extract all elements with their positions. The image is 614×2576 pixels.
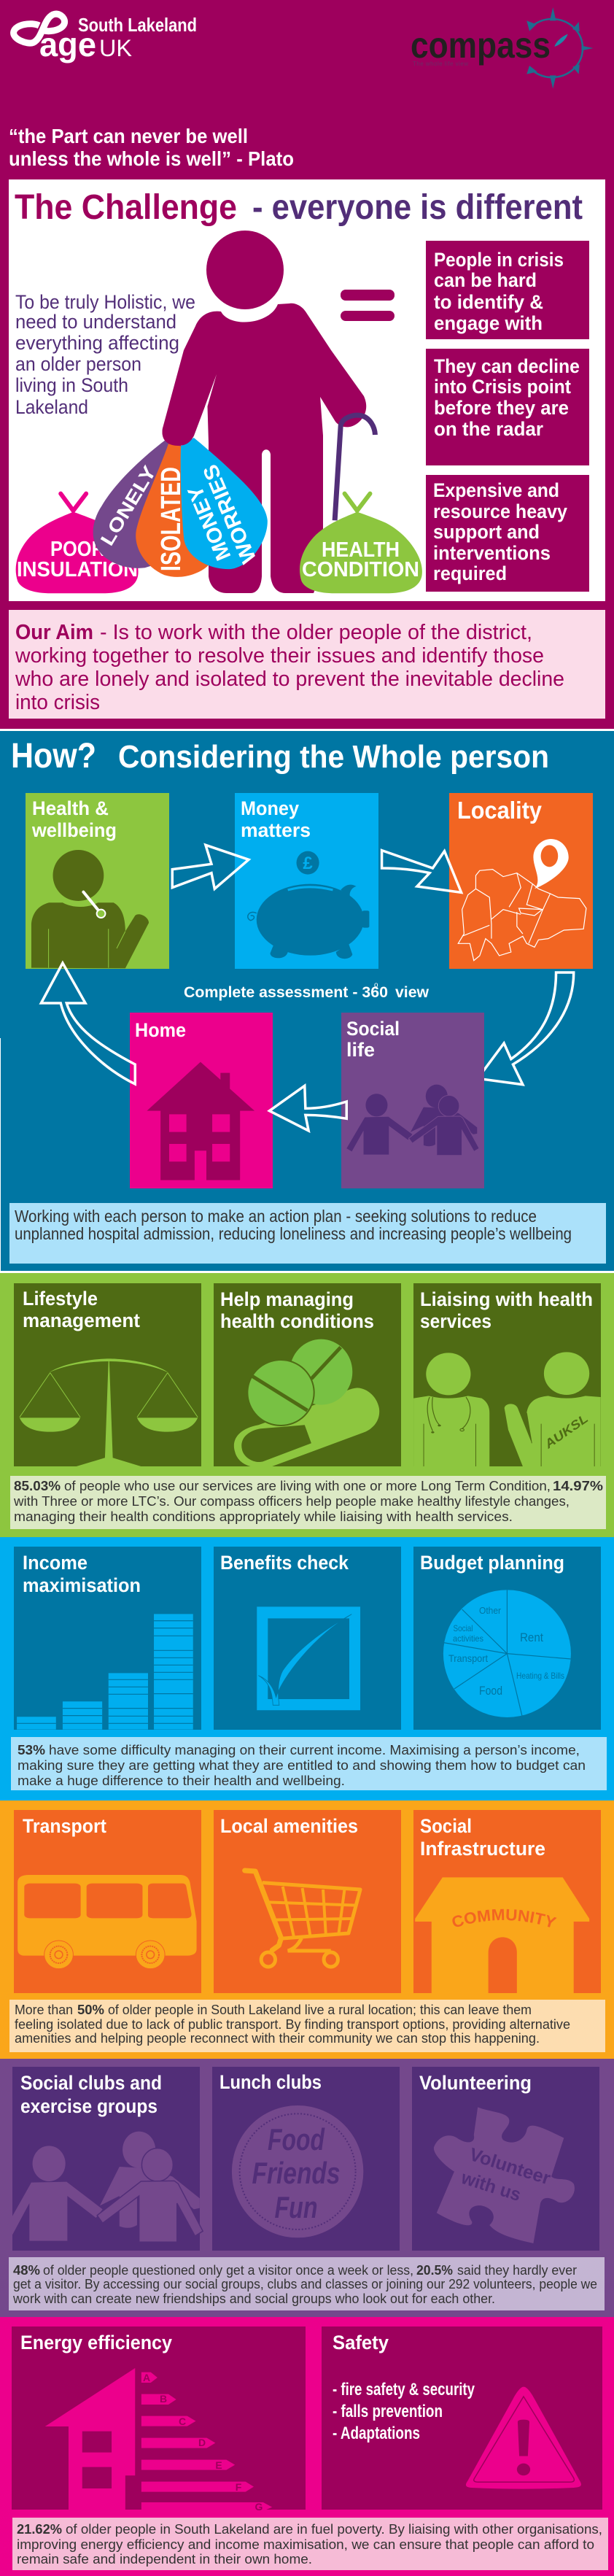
panel: liaising with health services: services [420, 1310, 491, 1332]
panel: volunteering: Volunteering [419, 2072, 532, 2094]
heading: how: Considering the Whole person [118, 739, 549, 775]
arrow: money to locality [382, 851, 462, 892]
text: rural statistics: amenities and helping people reconnect with their community we can stop this happening. [15, 2030, 540, 2046]
panel: our aim: working together to resolve their issues and identify those [15, 644, 544, 668]
text: holistic intro: To be truly Holistic, we [15, 291, 195, 313]
panel: income maximisation: Income [23, 1552, 88, 1574]
bag: money worries: WORRIES [199, 461, 261, 567]
heading: the challenge [15, 188, 583, 227]
card: locality: Locality [457, 797, 543, 824]
icon: equals sign [341, 290, 395, 321]
icon: warning triangle [466, 2387, 581, 2489]
panel: benefits check: Benefits check [220, 1552, 349, 1574]
section: social [0, 2059, 614, 2317]
icon: map of south lakeland with pin [458, 839, 586, 961]
section: how - whole person [0, 731, 614, 1271]
top section background [0, 0, 614, 729]
logo: South Lakeland Age UK [14, 14, 197, 63]
callout: expensive support: Expensive and [433, 479, 559, 501]
panel: liaising with health services [413, 1283, 601, 1466]
arrow: health to money [172, 845, 249, 889]
panel: help managing health conditions: Help managing [220, 1288, 354, 1310]
text: rural statistics: More than [15, 2002, 73, 2017]
heading: the challenge: The Challenge [15, 188, 237, 227]
card: money matters: Money [241, 797, 299, 819]
card: money matters: £ [303, 854, 313, 873]
callout: expensive support: interventions [433, 542, 551, 564]
panel: liaising with health services: Liaising with health [420, 1288, 593, 1310]
callout: people in crisis: People in crisis [434, 249, 564, 271]
card: home: Home [135, 1019, 186, 1041]
bag: money worries: MONEY [184, 482, 236, 564]
callout: people in crisis [426, 241, 589, 339]
callout: decline into crisis: on the radar [434, 418, 543, 440]
list: safety topics [333, 2380, 475, 2443]
panel: energy efficiency [12, 2326, 306, 2513]
chart: budget pie: activities [453, 1633, 483, 1644]
icon: piggy bank [248, 851, 369, 959]
text: health statistics [10, 1476, 606, 1529]
icon: house with energy ratings: B [160, 2393, 167, 2405]
card: social life: life [346, 1039, 375, 1061]
icon: house with energy ratings: F [236, 2481, 242, 2493]
bag: lonely: LONELY [96, 462, 160, 549]
text: income statistics: making sure they are getting what they are entitled to and showing them how to budget can [18, 1757, 586, 1773]
text: health statistics: managing their health conditions appropriately while liaising with health services. [14, 1509, 513, 1524]
card: health and wellbeing: wellbeing [31, 819, 117, 841]
icon: tick box [257, 1606, 360, 1710]
text: income statistics [11, 1737, 607, 1790]
text: holistic intro: living in South [15, 374, 128, 396]
logo: South Lakeland Age UK: UK [99, 35, 132, 61]
panel: social infrastructure: Social [420, 1815, 472, 1837]
heading: how [11, 737, 549, 775]
panel: social infrastructure: Infrastructure [420, 1838, 545, 1860]
text: holistic intro: an older person [15, 353, 141, 375]
callout: expensive support [426, 475, 589, 592]
icon: three people [346, 1085, 479, 1156]
text: income statistics: have some difficulty managing on their current income. Maximising a person’s income, [49, 1742, 580, 1757]
text: health statistics: with Three or more LTC’s. Our compass officers help people make healthy lifestyle changes, [13, 1493, 570, 1509]
card: health and wellbeing: Health & [32, 797, 109, 819]
text: rural statistics: 50% [77, 2002, 104, 2017]
list: safety topics: - falls prevention [333, 2402, 443, 2421]
callout: people in crisis: engage with [434, 312, 543, 334]
callout: decline into crisis: into Crisis point [434, 376, 571, 398]
bag: isolated: ISOLATED [156, 467, 187, 571]
callout: people in crisis: to identify & [434, 291, 543, 313]
card: health and wellbeing [26, 793, 169, 969]
arrow: locality to social life [478, 972, 574, 1085]
panel: social clubs and exercise groups: Social clubs and [20, 2072, 162, 2094]
text: holistic intro: everything affecting [15, 332, 179, 354]
text: health statistics: of people who use our services are living with one or more Long Term Condition, [64, 1478, 551, 1493]
icon: house with energy ratings: D [198, 2437, 206, 2448]
panel: income maximisation [14, 1547, 201, 1730]
text: action plan [9, 1203, 606, 1264]
icon: scales [20, 1358, 198, 1466]
text: fuel poverty statistics: improving energy efficiency and income maximisation, we can ensure that people can afford to [17, 2537, 594, 2552]
text: visitor statistics: 20.5% [416, 2262, 453, 2278]
callout: expensive support: support and [433, 521, 540, 543]
text: rural statistics: feeling isolated due to lack of public transport. By finding transport options, providing alternative [15, 2016, 570, 2032]
arrow: home to health [41, 963, 135, 1084]
icon: food friends fun stamp: Friends [252, 2156, 340, 2190]
icon: jigsaw piece: with us [458, 2167, 524, 2205]
icon: house with energy ratings: E [215, 2459, 222, 2471]
text: income statistics: 53% [18, 1742, 45, 1757]
panel: lifestyle management [14, 1283, 201, 1466]
logo: compass [411, 7, 594, 89]
text: fuel poverty statistics [12, 2518, 608, 2570]
panel: social clubs and exercise groups: exercise groups [20, 2095, 158, 2117]
icon: community building [415, 1877, 589, 1993]
text: complete assessment: view [395, 984, 430, 1001]
bag: poor insulation [16, 494, 139, 593]
panel: safety: Safety [333, 2332, 389, 2353]
bag: isolated [136, 444, 219, 577]
panel: lifestyle management: Lifestyle [23, 1288, 98, 1310]
text: complete assessment: o [374, 981, 378, 989]
bag: lonely [93, 438, 184, 568]
logo: compass: compass [411, 25, 551, 66]
text: holistic intro: Lakeland [15, 396, 88, 418]
callout: decline into crisis [426, 349, 589, 465]
text: health statistics: 14.97% [553, 1478, 603, 1493]
panel: our aim: who are lonely and isolated to prevent the inevitable decline [15, 668, 564, 691]
text: visitor statistics: of older people questioned only get a visitor once a week or less, [43, 2262, 413, 2278]
icon: house with energy ratings: A [143, 2372, 150, 2383]
icon: house with energy ratings: C [179, 2416, 186, 2427]
panel: lunch clubs: Lunch clubs [219, 2071, 322, 2093]
callout: people in crisis: can be hard [434, 269, 537, 291]
logo: South Lakeland Age UK: age [39, 26, 96, 63]
chart: budget pie: Social [454, 1623, 473, 1633]
panel: income maximisation: maximisation [23, 1574, 141, 1596]
panel: our aim: Our Aim [15, 621, 93, 644]
quote [9, 125, 294, 170]
card: locality [449, 793, 593, 969]
icon: three people [4, 2132, 203, 2242]
panel: lifestyle management: management [23, 1310, 140, 1331]
list: safety topics: - fire safety & security [333, 2380, 475, 2399]
text: fuel poverty statistics: of older people in South Lakeland are in fuel poverty. By liaising with other organisations, [66, 2521, 602, 2537]
text: income statistics: make a huge difference to their health and wellbeing. [18, 1773, 345, 1788]
icon: house with energy ratings [45, 2368, 272, 2513]
panel: local amenities [214, 1810, 401, 1993]
chart: budget pie [443, 1590, 571, 1717]
text: rural statistics [9, 2000, 605, 2052]
icon: food friends fun stamp: Food [268, 2122, 325, 2157]
text: fuel poverty statistics: 21.62% [17, 2521, 62, 2537]
panel: budget planning [413, 1547, 601, 1730]
text: visitor statistics: get a visitor. By accessing our social groups, clubs and classes or joining our 292 volunteers, people we [13, 2276, 597, 2291]
section: locality [0, 1801, 614, 2059]
panel: social infrastructure: COMMUNITY [452, 1908, 557, 1927]
icon: walking cane [335, 415, 375, 520]
chart: budget pie: Transport [448, 1652, 488, 1664]
arrow: social life to home [269, 1086, 346, 1131]
icon: pills [234, 1339, 379, 1466]
logo: South Lakeland Age UK: South Lakeland [78, 14, 197, 36]
callout: expensive support: required [433, 562, 507, 584]
card: money matters [235, 793, 378, 969]
figure: older person [163, 231, 366, 593]
icon: food friends fun stamp [232, 2105, 363, 2237]
panel: social clubs and exercise groups [4, 2067, 203, 2251]
panel: liaising with health services: AUKSL [541, 1412, 591, 1452]
panel: transport: Transport [23, 1815, 106, 1837]
panel: our aim: into crisis [15, 691, 100, 714]
section: health [0, 1273, 614, 1537]
quote: “the Part can never be well [9, 125, 248, 147]
chart: budget pie: Heating & Bills [516, 1671, 564, 1681]
section: home [0, 2317, 614, 2576]
heading: the challenge: - everyone is different [252, 188, 583, 227]
panel: volunteering [412, 2067, 599, 2251]
text: visitor statistics [9, 2257, 605, 2310]
text: rural statistics: of older people in South Lakeland live a rural location; this can leave them [108, 2002, 532, 2017]
icon: doctor and patient [413, 1352, 601, 1466]
bag: poor insulation: INSULATION [17, 558, 138, 581]
bag: health condition [300, 494, 422, 593]
panel: lunch clubs [212, 2067, 400, 2251]
text: holistic intro [15, 291, 195, 418]
panel: social infrastructure [413, 1810, 601, 1993]
chart: budget pie: Other [479, 1605, 502, 1616]
bag: health condition: CONDITION [302, 558, 419, 581]
heading: how: How? [11, 737, 96, 775]
card: home [130, 1013, 273, 1188]
panel: our aim: - Is to work with the older people of the district, [100, 621, 532, 644]
list: safety topics: - Adaptations [333, 2424, 420, 2443]
text: health statistics: 85.03% [14, 1478, 61, 1493]
text: fuel poverty statistics: remain safe and independent in their own home. [17, 2551, 312, 2567]
text: visitor statistics: work with can create new friendships and social groups who look out for each other. [12, 2291, 495, 2306]
card: money matters: matters [241, 819, 311, 841]
icon: house with energy ratings: G [255, 2501, 263, 2513]
panel: our aim [9, 610, 605, 719]
icon: shopping trolley [245, 1871, 360, 1967]
panel: help managing health conditions: health conditions [220, 1310, 374, 1332]
icon: bus [18, 1875, 197, 1969]
chart: budget pie: Rent [520, 1631, 543, 1644]
logo: compass: The whole life view [413, 61, 468, 67]
card: social life [341, 1013, 484, 1188]
panel: the challenge [9, 179, 605, 601]
panel: benefits check [214, 1547, 401, 1730]
panel: safety [322, 2326, 602, 2510]
chart: rising bars [17, 1614, 193, 1730]
card: social life: Social [346, 1018, 400, 1040]
bag: health condition: HEALTH [322, 538, 400, 562]
panel: transport [14, 1810, 201, 1993]
icon: jigsaw piece [434, 2107, 575, 2243]
quote: unless the whole is well” - Plato [9, 147, 294, 170]
text: complete assessment [184, 981, 430, 1001]
section: money [0, 1537, 614, 1801]
text: action plan: Working with each person to make an action plan - seeking solutions to reduce [15, 1207, 537, 1226]
callout: decline into crisis: They can decline [434, 355, 580, 377]
bag: money worries [181, 438, 268, 569]
hand holding bags [163, 387, 205, 446]
icon: house [147, 1062, 254, 1180]
callout: decline into crisis: before they are [434, 397, 569, 419]
icon: jigsaw piece: Volunteer [467, 2144, 553, 2189]
panel: local amenities: Local amenities [220, 1815, 358, 1837]
icon: food friends fun stamp: Fun [274, 2190, 318, 2224]
text: holistic intro: need to understand [15, 311, 176, 333]
bag: poor insulation: POOR [50, 538, 105, 561]
text: visitor statistics: said they hardly ever [457, 2262, 577, 2278]
panel: help managing health conditions [214, 1283, 401, 1466]
panel: energy efficiency: Energy efficiency [20, 2332, 172, 2353]
callout: expensive support: resource heavy [433, 500, 567, 522]
text: visitor statistics: 48% [13, 2262, 40, 2278]
chart: budget pie: Food [479, 1684, 502, 1698]
panel: budget planning: Budget planning [420, 1552, 564, 1574]
icon: person with thermometer [31, 850, 149, 968]
text: complete assessment: Complete assessment - 360 [184, 984, 388, 1001]
